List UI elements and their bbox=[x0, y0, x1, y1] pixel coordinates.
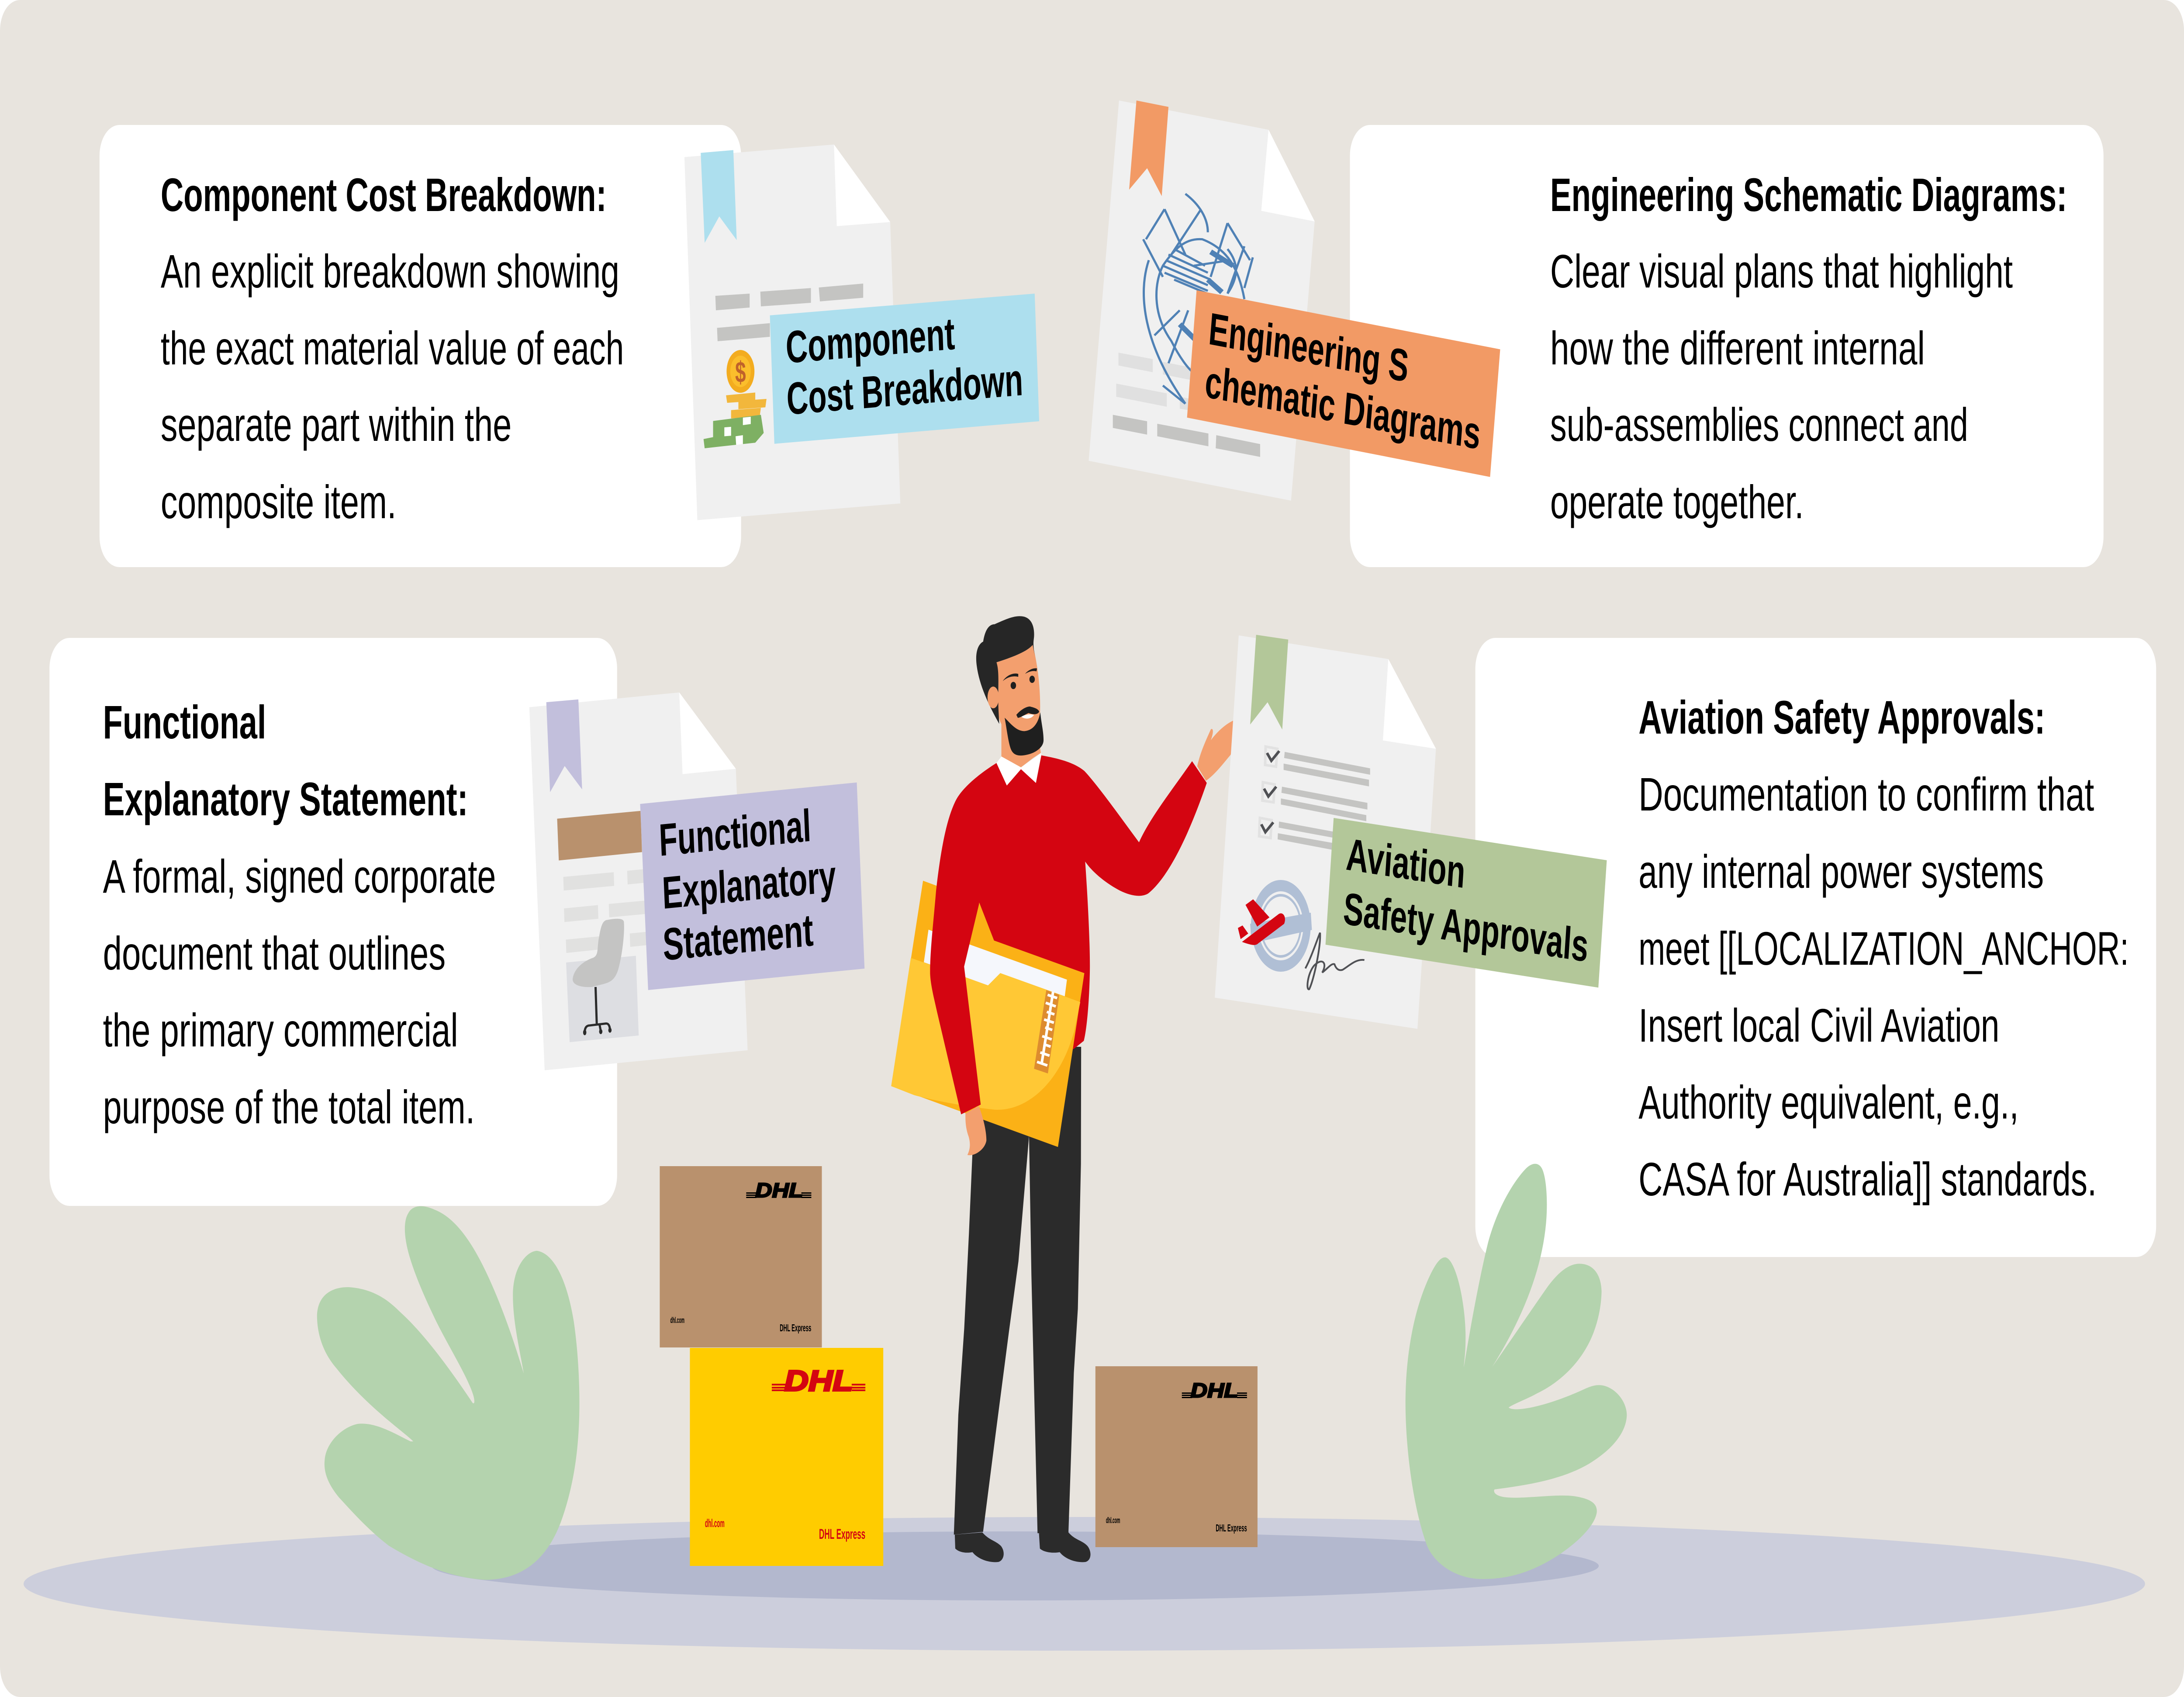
heading: component cost breakdown: Component Cost Breakdown: bbox=[161, 169, 607, 222]
label: functional explanatory statement: Statement bbox=[662, 904, 814, 970]
label: functional explanatory statement bbox=[658, 800, 837, 970]
text block: aviation description: any internal power systems bbox=[1638, 846, 2044, 898]
man holding folder bbox=[891, 616, 1234, 1562]
icon: coin: $ bbox=[735, 356, 746, 389]
box: yellow DHL parcel: dhl.com bbox=[705, 1517, 725, 1530]
text block: statement description: the primary commercial bbox=[103, 1004, 458, 1057]
box: brown DHL parcel stacked: DHL bbox=[755, 1180, 803, 1202]
ground ellipses bbox=[24, 1517, 2145, 1651]
box: brown DHL parcel on floor: dhl.com bbox=[1106, 1516, 1120, 1525]
label: engineering schematic diagrams: chematic Diagrams bbox=[1203, 356, 1482, 459]
text block: schematic description: sub-assemblies connect and bbox=[1550, 399, 1968, 451]
label: component cost breakdown: Cost Breakdown bbox=[786, 354, 1024, 424]
box: brown DHL parcel on floor bbox=[1095, 1366, 1258, 1547]
text block: component cost description: An explicit breakdown showing bbox=[161, 246, 619, 298]
panel: functional explanatory statement bbox=[49, 638, 617, 1206]
heading: engineering schematic diagrams: Engineering Schematic Diagrams: bbox=[1550, 169, 2067, 222]
heading: functional explanatory statement: Functional bbox=[103, 696, 266, 749]
icon: blueprint schematic bbox=[1143, 194, 1253, 404]
document: aviation safety approvals bbox=[1215, 635, 1607, 1029]
box: yellow DHL parcel bbox=[690, 1348, 883, 1566]
man: upper body bbox=[891, 616, 1234, 1155]
text block: statement description: A formal, signed corporate bbox=[103, 851, 496, 903]
icon: left plant bbox=[317, 1206, 579, 1580]
box: brown DHL parcel stacked: dhl.com bbox=[670, 1316, 684, 1325]
icon: right plant bbox=[1406, 1164, 1627, 1579]
icon: checklist bbox=[1259, 747, 1370, 850]
heading: aviation safety approvals: Aviation Safety Approvals: bbox=[1638, 692, 2045, 744]
label: aviation safety approvals: Safety Approvals bbox=[1342, 883, 1590, 972]
text block: statement description bbox=[103, 851, 496, 1134]
text block: statement description: purpose of the total item. bbox=[103, 1081, 475, 1134]
icon: office chair bbox=[573, 919, 624, 1035]
text block: component cost description: composite item. bbox=[161, 476, 397, 529]
box: brown DHL parcel on floor: DHL bbox=[1191, 1380, 1238, 1402]
text block: schematic description bbox=[1550, 246, 2013, 529]
document: component cost breakdown bbox=[684, 145, 1039, 520]
document: functional explanatory statement bbox=[529, 693, 864, 1070]
box: brown DHL parcel stacked bbox=[660, 1166, 822, 1347]
label: component cost breakdown: Component bbox=[785, 308, 956, 373]
text block: aviation description: Insert local Civil Aviation bbox=[1638, 1000, 1999, 1052]
label: functional explanatory statement: Explanatory bbox=[661, 851, 837, 918]
heading: functional explanatory statement: Explanatory Statement: bbox=[103, 773, 468, 826]
text block: schematic description: how the different internal bbox=[1550, 322, 1925, 375]
panel: engineering schematic diagrams bbox=[1350, 125, 2104, 567]
text block: component cost description: the exact material value of each bbox=[161, 322, 624, 375]
text block: aviation description: Authority equivalent, e.g., bbox=[1638, 1077, 2019, 1129]
box: yellow DHL parcel: DHL bbox=[784, 1365, 853, 1397]
label: aviation safety approvals bbox=[1326, 818, 1607, 987]
text block: aviation description bbox=[1638, 769, 2129, 1206]
document: engineering schematic diagrams bbox=[1089, 100, 1500, 501]
text block: schematic description: operate together. bbox=[1550, 476, 1804, 529]
text block: aviation description: CASA for Australia]] standards. bbox=[1638, 1153, 2097, 1206]
box: brown DHL parcel on floor: DHL Express bbox=[1216, 1523, 1247, 1534]
label: aviation safety approvals: Aviation bbox=[1345, 829, 1467, 898]
panel: component cost breakdown bbox=[100, 125, 741, 567]
icon: red aeroplane bbox=[1238, 899, 1285, 945]
text block: statement description: document that outlines bbox=[103, 928, 446, 980]
text block: aviation description: Documentation to confirm that bbox=[1638, 769, 2094, 821]
label: functional explanatory statement: Functional bbox=[658, 800, 812, 866]
man: trousers and shoes bbox=[954, 1047, 1091, 1562]
text block: component cost description bbox=[161, 246, 624, 529]
label: engineering schematic diagrams bbox=[1203, 303, 1482, 459]
text block: aviation description: meet [[LOCALIZATION_ANCHOR: bbox=[1638, 923, 2129, 975]
icon: coin bbox=[726, 350, 754, 393]
icon: signature bbox=[1305, 933, 1365, 989]
box: yellow DHL parcel: DHL Express bbox=[819, 1527, 865, 1542]
box: brown DHL parcel stacked: DHL Express bbox=[780, 1323, 811, 1334]
label: component cost breakdown bbox=[770, 294, 1039, 444]
panel: aviation safety approvals bbox=[1476, 638, 2156, 1257]
label: engineering schematic diagrams: Engineering S bbox=[1207, 303, 1410, 392]
text block: component cost description: separate part within the bbox=[161, 399, 511, 451]
heading: functional explanatory statement bbox=[103, 696, 468, 826]
icon: approval stamp bbox=[1250, 886, 1312, 966]
text block: schematic description: Clear visual plans that highlight bbox=[1550, 246, 2013, 298]
